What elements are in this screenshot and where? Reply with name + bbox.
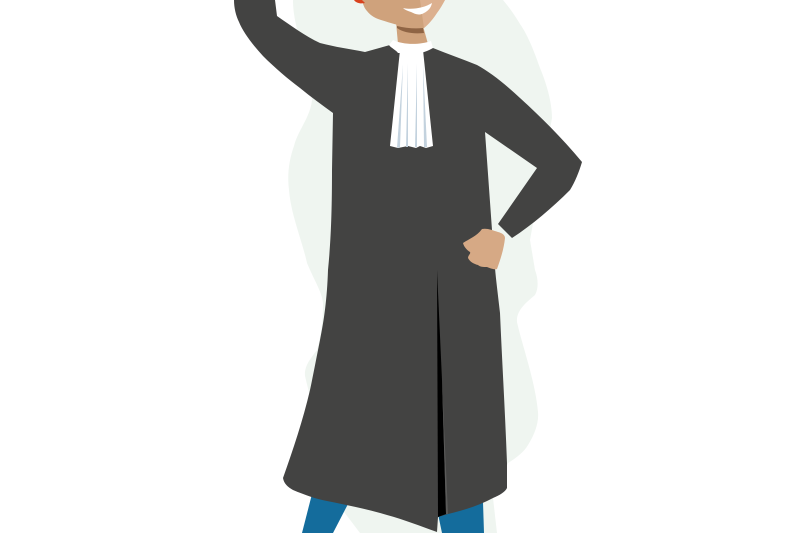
neck <box>396 22 428 44</box>
collar <box>389 40 433 53</box>
left leg <box>302 494 348 533</box>
background blob <box>288 0 552 533</box>
face highlight <box>420 0 445 28</box>
right leg <box>438 502 484 533</box>
gown <box>234 0 582 532</box>
fist <box>463 229 505 269</box>
bands <box>390 50 433 148</box>
smile <box>403 3 432 15</box>
gown pleat <box>437 270 448 517</box>
clerical bands <box>389 40 433 148</box>
band folds <box>397 63 427 148</box>
face <box>354 0 445 28</box>
neck shadow <box>397 26 424 33</box>
pleat edge <box>442 380 448 514</box>
ear / hair accent <box>354 0 365 3</box>
legs <box>302 494 484 533</box>
